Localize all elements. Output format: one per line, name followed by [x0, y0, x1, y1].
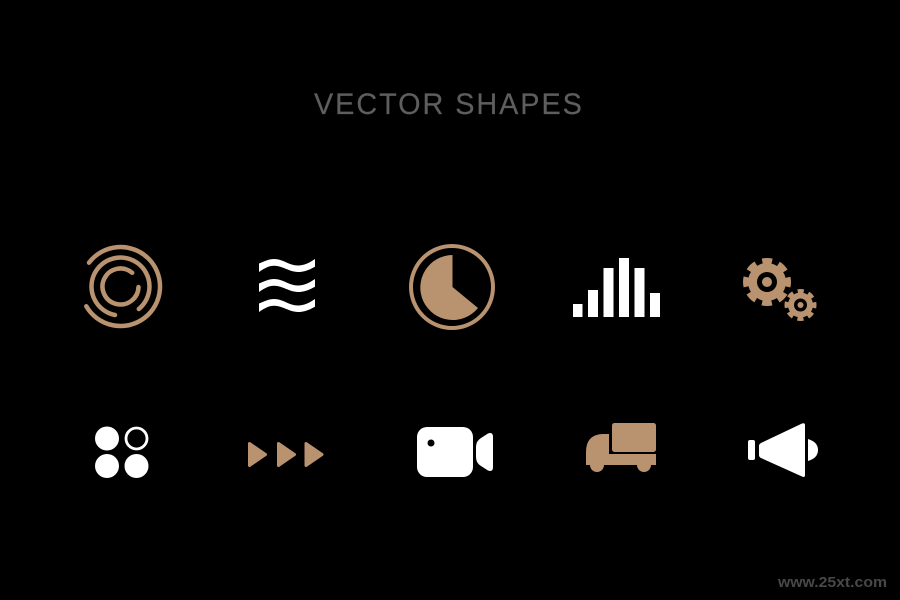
watermark: www.25xt.com: [777, 575, 887, 591]
icon: megaphone speaker: [748, 423, 818, 477]
icon: delivery truck: [586, 423, 656, 472]
title: VECTOR SHAPES: [314, 87, 582, 121]
icon: three play arrows: [250, 444, 322, 466]
icon: gears: [746, 262, 814, 318]
icon: bar chart: [573, 258, 660, 317]
icon: concentric broken circles: [86, 247, 160, 326]
icon: waves: [259, 259, 315, 312]
icon: video camera: [417, 427, 493, 477]
icon: four circles: [95, 426, 148, 478]
icon: pie chart in ring: [411, 246, 493, 328]
